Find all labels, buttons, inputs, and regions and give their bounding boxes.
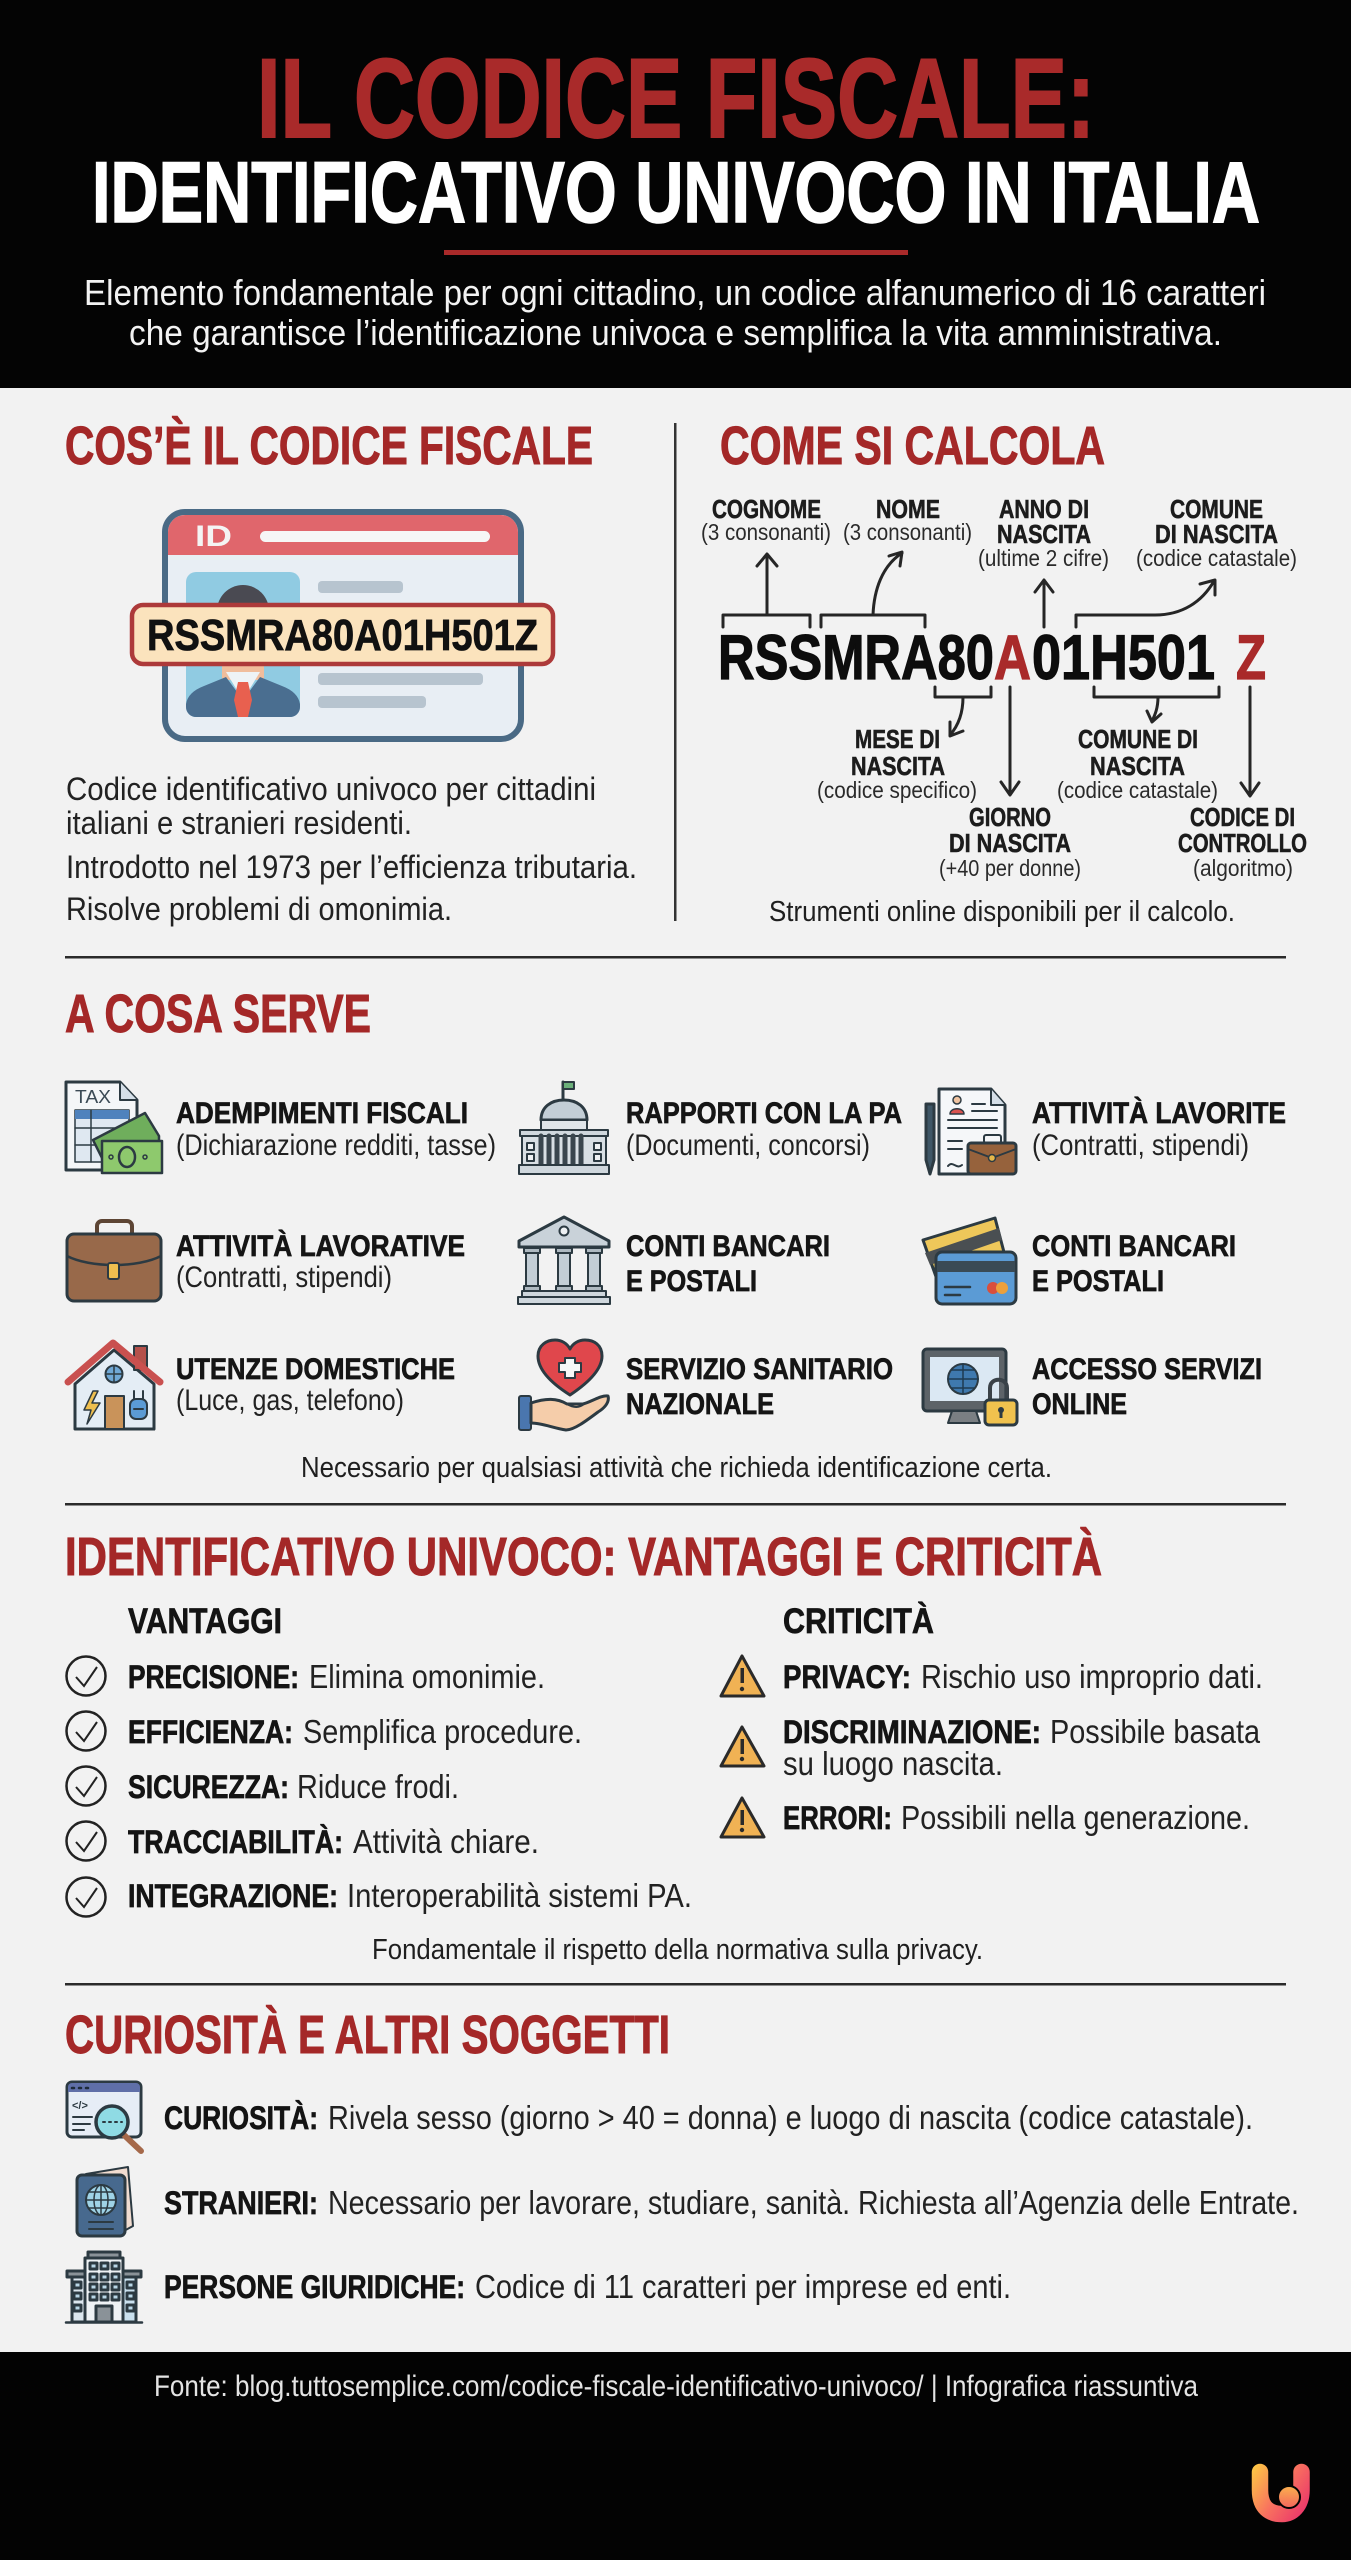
item: conti bancari e postali (2): CONTI BANCARI (1032, 1230, 1236, 1263)
item: precisione: Elimina omonimie. (309, 1658, 545, 1695)
title: IL CODICE FISCALE: (257, 36, 1095, 161)
label: codice di controllo (1178, 802, 1307, 881)
description text: Risolve problemi di omonimia. (66, 891, 452, 927)
item: privacy: PRIVACY: (783, 1659, 911, 1695)
label: comune di nascita (alto): COMUNE (1170, 494, 1263, 524)
label: mese di nascita (817, 724, 977, 803)
item: rapporti con la PA (626, 1097, 902, 1162)
icon: tax form with money: TAX (75, 1087, 111, 1107)
heading: COS’È IL CODICE FISCALE (65, 416, 593, 476)
label: comune di nascita (basso): (codice catastale) (1057, 777, 1218, 803)
item: conti bancari e postali: CONTI BANCARI (626, 1230, 830, 1263)
label: giorno di nascita: (+40 per donne) (939, 855, 1081, 881)
source text: Fonte: blog.tuttosemplice.com/codice-fiscale-identificativo-univoco/ | Infografica riassuntiva (154, 2370, 1198, 2403)
label: comune di nascita (basso) (1057, 724, 1218, 803)
item: accesso servizi online: ACCESSO SERVIZI (1032, 1353, 1262, 1386)
label: codice di controllo: CONTROLLO (1178, 828, 1307, 858)
note: Strumenti online disponibili per il calcolo. (769, 896, 1235, 928)
item: tracciabilità (66, 1822, 539, 1860)
icon: government building (519, 1082, 609, 1174)
list: criticità (721, 1656, 1263, 1837)
item: adempimenti fiscali: (Dichiarazione redditi, tasse) (176, 1129, 496, 1162)
item: integrazione: Interoperabilità sistemi PA. (347, 1877, 692, 1914)
item: precisione: PRECISIONE: (128, 1659, 299, 1695)
item: utenze domestiche: (Luce, gas, telefono) (176, 1384, 404, 1417)
label: comune di nascita (alto): DI NASCITA (1155, 519, 1278, 549)
item: accesso servizi online (1032, 1353, 1262, 1421)
description text: Introdotto nel 1973 per l’efficienza tributaria. (66, 849, 637, 885)
item: discriminazione (721, 1713, 1261, 1782)
item: servizio sanitario nazionale: SERVIZIO SANITARIO (626, 1353, 893, 1386)
label: mese di nascita: NASCITA (851, 751, 945, 781)
item: attività lavorite: ATTIVITÀ LAVORITE (1032, 1096, 1286, 1130)
item: sicurezza: Riduce frodi. (297, 1768, 459, 1805)
list: vantaggi (66, 1656, 692, 1916)
label: nome: (3 consonanti) (843, 519, 972, 545)
description text: Codice identificativo univoco per cittadini (66, 771, 596, 807)
item: tracciabilità: Attività chiare. (353, 1823, 539, 1860)
note: Fondamentale il rispetto della normativa sulla privacy. (372, 1934, 983, 1966)
icon: contract and briefcase (926, 1089, 1016, 1174)
icon: passport (77, 2167, 133, 2236)
item: conti bancari e postali (2) (1032, 1230, 1236, 1298)
heading: A COSA SERVE (65, 984, 371, 1044)
item: discriminazione: Possibile basata (1050, 1713, 1261, 1750)
icon: ID card: RSSMRA80A01H501Z (147, 611, 538, 660)
item: errori: Possibili nella generazione. (901, 1799, 1250, 1836)
icon: monitor with lock (923, 1349, 1017, 1425)
item: persone giuridiche: PERSONE GIURIDICHE: (164, 2269, 465, 2305)
item: integrazione: INTEGRAZIONE: (128, 1878, 338, 1914)
item: curiosità: CURIOSITÀ: (164, 2100, 318, 2136)
heading: COME SI CALCOLA (720, 416, 1105, 476)
heading: CURIOSITÀ E ALTRI SOGGETTI (65, 2005, 670, 2065)
icon: tax form with money (66, 1082, 162, 1173)
panel: cos'è il codice fiscale (65, 416, 637, 927)
item: errori: ERRORI: (783, 1800, 892, 1836)
panel: a cosa serve (65, 984, 1286, 1484)
item: attività lavorite: (Contratti, stipendi) (1032, 1129, 1249, 1162)
description text (66, 771, 637, 927)
item: efficienza: Semplifica procedure. (303, 1713, 582, 1750)
icon: ID card: ID (195, 520, 232, 553)
column heading: vantaggi: VANTAGGI (128, 1602, 282, 1641)
code breakdown (718, 623, 1266, 693)
item: attività lavorative: ATTIVITÀ LAVORATIVE (176, 1229, 465, 1263)
item: conti bancari e postali (2): E POSTALI (1032, 1265, 1164, 1298)
label: comune di nascita (basso): COMUNE DI (1078, 724, 1198, 754)
description text: italiani e stranieri residenti. (66, 805, 412, 841)
label: giorno di nascita: GIORNO (969, 802, 1051, 832)
icon: bank (518, 1217, 610, 1304)
item: attività lavorative (176, 1229, 465, 1294)
arrows: bottom brackets (935, 687, 1259, 796)
item: persone giuridiche: Codice di 11 caratteri per imprese ed enti. (475, 2268, 1011, 2305)
item: adempimenti fiscali: ADEMPIMENTI FISCALI (176, 1097, 468, 1130)
label: codice di controllo: CODICE DI (1190, 802, 1295, 832)
label: cognome: (3 consonanti) (701, 519, 831, 545)
icon: logo (1260, 2472, 1302, 2514)
panel: footer (0, 2352, 1351, 2560)
item: precisione (66, 1656, 545, 1696)
item: discriminazione: DISCRIMINAZIONE: (783, 1714, 1041, 1750)
label: giorno di nascita (939, 802, 1081, 881)
intro text (84, 272, 1266, 353)
icon: house with utilities (68, 1343, 160, 1430)
code breakdown: Z (1236, 623, 1266, 693)
code breakdown: RSSMRA80 (718, 623, 994, 693)
item: persone giuridiche (164, 2268, 1011, 2305)
label: cognome (701, 494, 831, 545)
item: discriminazione: su luogo nascita. (783, 1745, 1003, 1782)
icon: credit cards (923, 1218, 1016, 1304)
label: giorno di nascita: DI NASCITA (949, 828, 1071, 858)
column heading: criticità: CRITICITÀ (783, 1601, 934, 1641)
item: efficienza: EFFICIENZA: (128, 1714, 293, 1750)
red divider (444, 250, 908, 255)
icon: code window with magnifier (67, 2082, 141, 2151)
label: mese di nascita: MESE DI (855, 724, 940, 754)
label: comune di nascita (alto): (codice catastale) (1136, 545, 1297, 571)
item: utenze domestiche (176, 1353, 455, 1417)
item: efficienza (66, 1712, 582, 1750)
code breakdown: 01H501 (1032, 623, 1215, 693)
label: nome (843, 494, 972, 545)
item: attività lavorite (1032, 1096, 1286, 1162)
label: nome: NOME (876, 494, 940, 524)
item: privacy (721, 1656, 1263, 1696)
item: conti bancari e postali (626, 1230, 830, 1298)
item: accesso servizi online: ONLINE (1032, 1388, 1127, 1421)
code breakdown: A (994, 623, 1031, 693)
item: sicurezza: SICUREZZA: (128, 1769, 289, 1805)
item: utenze domestiche: UTENZE DOMESTICHE (176, 1353, 455, 1386)
label: mese di nascita: (codice specifico) (817, 777, 977, 803)
icon: ID card (132, 512, 553, 739)
item: privacy: Rischio uso improprio dati. (921, 1658, 1263, 1695)
panel: curiosità e altri soggetti (65, 2005, 1299, 2322)
item: rapporti con la PA: RAPPORTI CON LA PA (626, 1097, 902, 1130)
label: anno di nascita: NASCITA (997, 519, 1091, 549)
item: errori (721, 1798, 1250, 1837)
label: comune di nascita (basso): NASCITA (1090, 751, 1185, 781)
item: servizio sanitario nazionale (626, 1353, 893, 1421)
item: attività lavorative: (Contratti, stipendi) (176, 1261, 392, 1294)
item: integrazione (66, 1877, 692, 1916)
label: anno di nascita: (ultime 2 cifre) (978, 545, 1109, 571)
item: sicurezza (66, 1766, 459, 1806)
intro text: Elemento fondamentale per ogni cittadino, un codice alfanumerico di 16 caratteri (84, 272, 1266, 313)
panel: come si calcola (701, 416, 1307, 928)
item: adempimenti fiscali (176, 1097, 496, 1162)
item: tracciabilità: TRACCIABILITÀ: (128, 1824, 343, 1860)
label: cognome: COGNOME (712, 494, 821, 524)
panel: vantaggi e criticità (65, 1527, 1263, 1966)
intro text: che garantisce l’identificazione univoca e semplifica la vita amministrativa. (129, 312, 1222, 353)
arrows: top brackets (723, 552, 1215, 627)
item: rapporti con la PA: (Documenti, concorsi) (626, 1129, 870, 1162)
icon: heart on hand (519, 1340, 608, 1430)
label: anno di nascita (978, 494, 1109, 571)
note: Necessario per qualsiasi attività che richieda identificazione certa. (301, 1452, 1052, 1484)
item: conti bancari e postali: E POSTALI (626, 1265, 757, 1298)
icon: office building (66, 2252, 142, 2322)
icon: briefcase (67, 1221, 161, 1301)
item: servizio sanitario nazionale: NAZIONALE (626, 1388, 774, 1421)
label: codice di controllo: (algoritmo) (1193, 855, 1293, 881)
label: comune di nascita (alto) (1136, 494, 1297, 571)
icon: code window with magnifier: </> (72, 2100, 88, 2112)
item: stranieri: STRANIERI: (164, 2185, 318, 2221)
label: anno di nascita: ANNO DI (999, 494, 1089, 524)
panel: header (0, 0, 1351, 388)
